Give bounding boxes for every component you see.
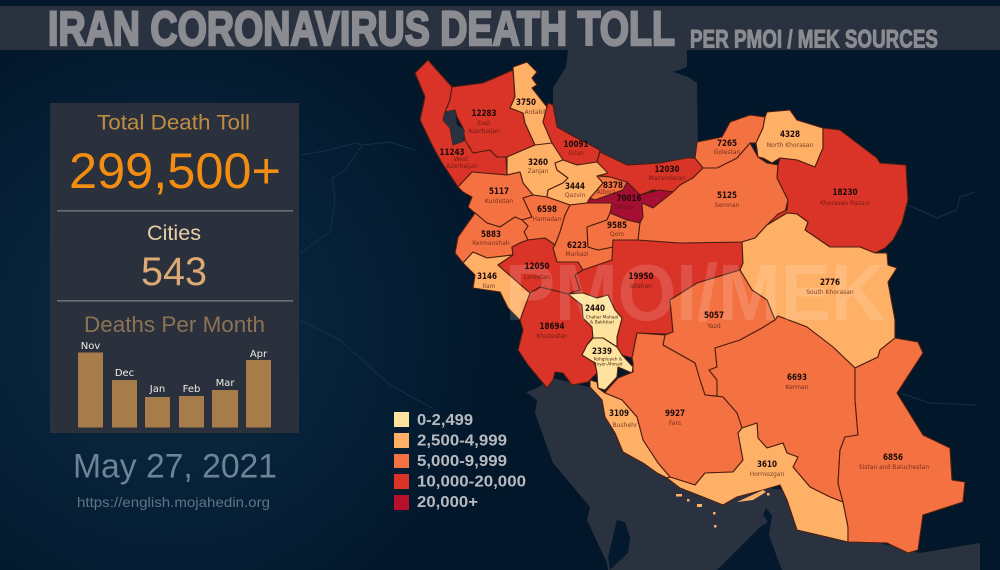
province labels: Azerbaijan <box>468 128 500 135</box>
legend: 5,000-9,999 <box>417 453 507 470</box>
province labels: 6856 <box>883 453 903 463</box>
province labels: Kurdistan <box>485 198 513 205</box>
province labels: Khuzestan <box>536 333 568 340</box>
province: Yazd <box>663 270 775 396</box>
number: total deaths: 299,500+ <box>69 143 281 199</box>
lake: Urmia <box>443 110 465 145</box>
province labels: & Bakhtiari <box>590 320 614 326</box>
province: Qom <box>587 213 640 250</box>
watermark: PMOI/MEK <box>505 248 885 337</box>
province: Kermanshah <box>455 213 528 263</box>
land: Qatar <box>608 520 630 570</box>
province labels: Sistan and Baluchestan <box>859 464 929 471</box>
province: Tehran <box>587 182 673 223</box>
province labels: 5117 <box>489 187 509 197</box>
province labels: Azerbaijan <box>446 163 478 170</box>
bar chart: deaths per month: Mar <box>216 378 235 389</box>
province labels: Alborz <box>597 189 615 196</box>
province labels: Boyer-Ahmad <box>594 362 623 368</box>
heading: cities: Cities <box>147 222 201 245</box>
province labels: Ilam <box>483 283 496 290</box>
heading: deaths per month: Deaths Per Month <box>84 312 265 337</box>
province: Isfahan <box>568 240 743 358</box>
province labels: 9585 <box>607 221 627 231</box>
province: South Khorasan <box>740 213 897 368</box>
province labels: Zanjan <box>528 168 549 175</box>
province: Hormozgan <box>667 423 848 542</box>
province labels: 12283 <box>472 109 497 119</box>
province: Kurdistan <box>458 172 533 227</box>
province labels: 6223 <box>567 241 587 251</box>
province: West Azerbaijan <box>415 60 507 187</box>
province labels: Hormozgan <box>750 471 784 478</box>
province: Alborz <box>590 176 627 200</box>
bar chart: deaths per month <box>78 341 271 428</box>
bar chart: deaths per month: Apr <box>250 349 268 360</box>
province labels: Lorestan <box>524 274 550 281</box>
province labels: 3610 <box>757 460 777 470</box>
province: Hamadan <box>522 195 570 245</box>
province labels: West <box>454 156 469 163</box>
province: Ilam <box>463 252 530 320</box>
legend: 2,500-4,999 <box>417 432 507 450</box>
province labels: 9927 <box>665 409 685 419</box>
province labels: 18694 <box>540 322 565 332</box>
province labels: Ardabil <box>524 109 546 116</box>
body of water: Persian Gulf and Gulf of Oman <box>526 378 980 570</box>
province labels: 5125 <box>717 191 737 201</box>
bar chart: deaths per month: Feb <box>183 384 200 395</box>
source url: https://english.mojahedin.org <box>77 494 270 510</box>
province labels: 2440 <box>585 304 605 314</box>
province: Fars <box>605 333 743 485</box>
province labels: 70016 <box>616 194 642 204</box>
province labels: 11243 <box>440 148 465 158</box>
title: IRAN CORONAVIRUS DEATH TOLL <box>48 3 675 56</box>
province: Gilan <box>543 103 600 165</box>
province: Chaharmahal and Bakhtiari <box>568 293 622 347</box>
province labels: Kohgiluyeh & <box>594 356 623 362</box>
province labels: 12050 <box>524 262 550 272</box>
heading: total death toll: Total Death Toll <box>97 112 250 134</box>
province labels: South Khorasan <box>806 289 854 296</box>
province labels: Isfahan <box>630 283 652 290</box>
province: Mazandaran <box>597 152 703 195</box>
map of Iran provinces <box>415 60 965 553</box>
province labels: Kerman <box>785 384 809 391</box>
legend: 20,000+ <box>417 494 478 511</box>
province labels: Gilan <box>568 150 584 157</box>
province labels: 4328 <box>780 130 800 140</box>
province: Zanjan <box>507 143 568 197</box>
province labels: Khorasan Razavi <box>820 200 870 207</box>
province: Golestan <box>695 115 765 168</box>
province labels: 2339 <box>592 347 612 357</box>
bar chart: deaths per month: Dec <box>115 368 134 379</box>
islands <box>676 490 770 528</box>
province labels: 5057 <box>704 311 724 321</box>
province labels: Golestan <box>714 149 741 156</box>
province: Sistan and Baluchestan <box>838 338 965 553</box>
province labels: 2776 <box>820 278 840 288</box>
province: Kerman <box>709 316 858 502</box>
province labels: Hamadan <box>532 216 562 223</box>
province labels: 10091 <box>564 140 589 150</box>
province labels: North Khorasan <box>767 142 814 149</box>
province: Lorestan <box>498 238 583 294</box>
province labels: 7265 <box>717 139 737 149</box>
province labels: 8378 <box>603 181 623 191</box>
province labels: Semnan <box>715 202 740 209</box>
bar chart: deaths per month: Jan <box>149 384 165 395</box>
province labels: 6598 <box>537 205 557 215</box>
legend: 10,000-20,000 <box>417 474 526 490</box>
province labels: 3146 <box>477 272 497 282</box>
legend <box>394 412 526 511</box>
province labels: 3260 <box>528 158 548 168</box>
province labels: East <box>478 120 491 127</box>
province labels: 6693 <box>787 373 807 383</box>
province: Markazi <box>553 203 613 270</box>
province: Ardabil <box>510 62 552 147</box>
province labels: Qazvin <box>565 192 585 199</box>
panel: statistics <box>50 103 299 433</box>
province labels: Markazi <box>565 251 589 258</box>
province: Semnan <box>638 143 788 243</box>
province labels: Qom <box>610 231 624 238</box>
bar chart: deaths per month: Nov <box>81 341 100 352</box>
province labels: 3109 <box>609 409 629 419</box>
province labels: 19950 <box>628 272 654 282</box>
province: Kohgiluyeh and Boyer-Ahmad <box>582 338 633 390</box>
province: East Azerbaijan <box>445 70 535 157</box>
province: Bushehr <box>590 380 670 478</box>
province: Qazvin <box>547 160 608 205</box>
province labels: 5883 <box>481 230 501 240</box>
province labels: Tehran <box>613 204 634 211</box>
province labels: Fars <box>669 420 681 427</box>
province: Khuzestan <box>518 287 597 388</box>
province labels: Yazd <box>706 323 721 330</box>
province labels: Chahar Mahaal <box>586 314 618 320</box>
province: Khorasan Razavi <box>767 128 908 253</box>
land: Oman peninsula <box>717 508 782 570</box>
province labels: 3750 <box>516 98 536 108</box>
legend: 0-2,499 <box>417 412 473 429</box>
province labels: 18230 <box>832 188 858 198</box>
province labels: Mazandaran <box>649 175 686 182</box>
date: May 27, 2021 <box>73 448 277 486</box>
body of water: Caspian Sea <box>553 50 698 165</box>
province labels: Kermanshah <box>472 240 510 247</box>
number: cities: 543 <box>141 250 207 294</box>
province labels: Bushehr <box>613 422 638 429</box>
title band <box>0 6 1000 50</box>
province: North Khorasan <box>756 110 823 167</box>
province labels: 3444 <box>565 182 585 192</box>
province labels: 12030 <box>654 165 680 175</box>
province labels <box>440 98 929 478</box>
